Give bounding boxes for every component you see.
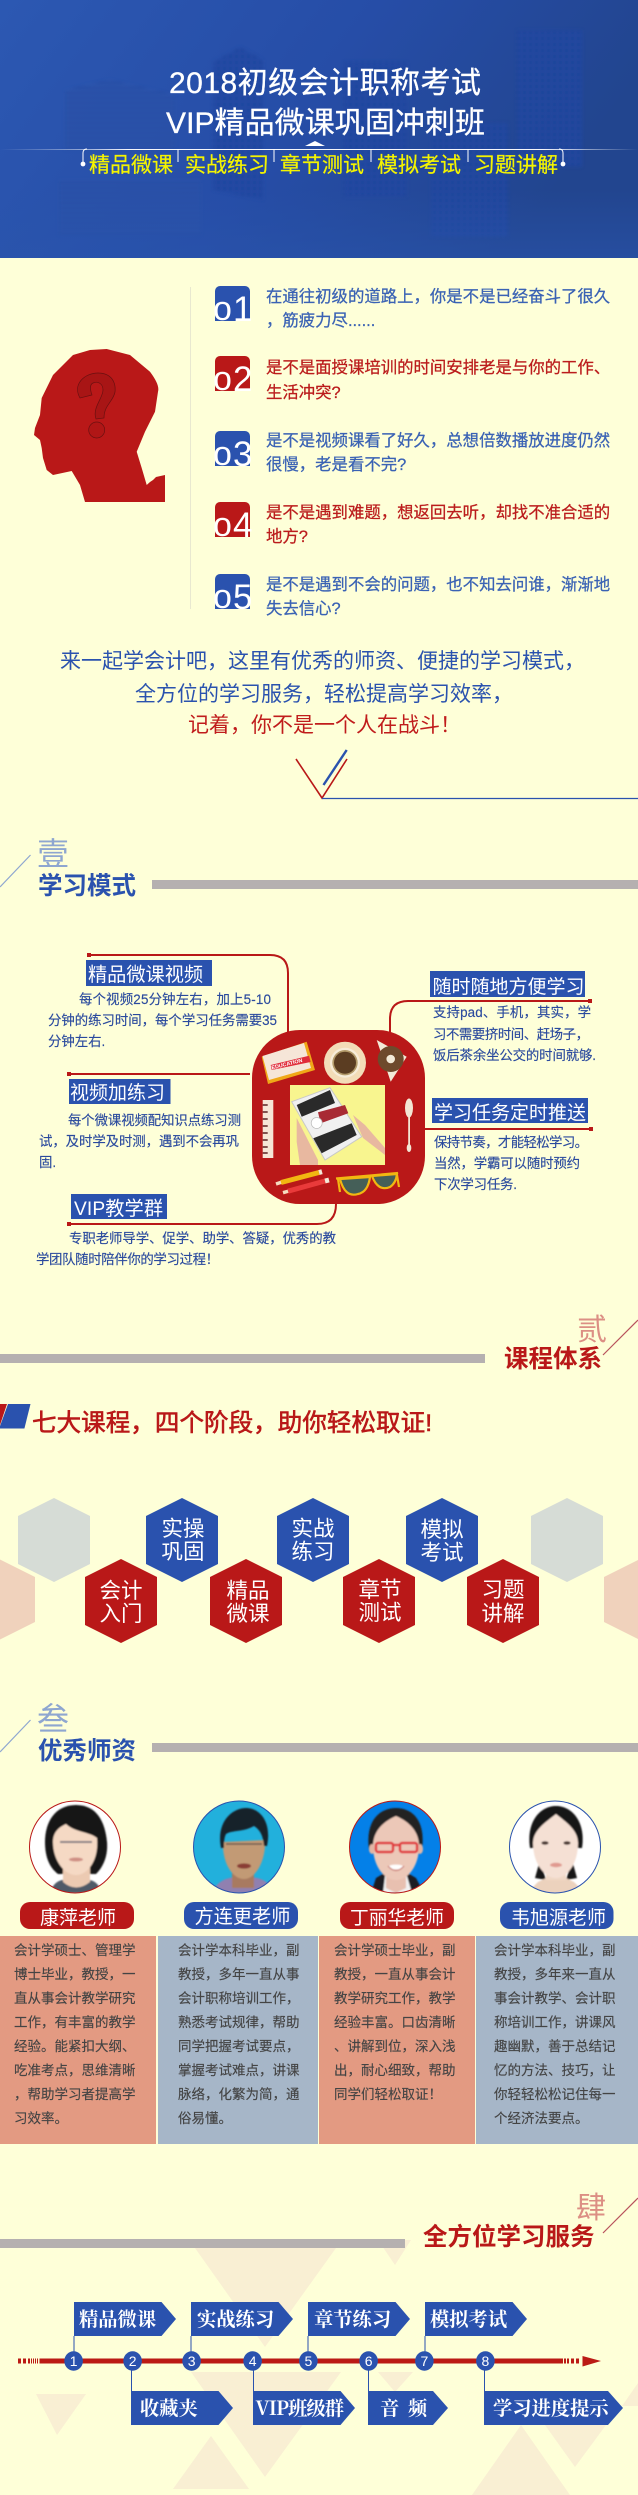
central red block <box>252 1030 425 1204</box>
feature: 学习任务定时推送: 当然，学霸可以随时预约 <box>434 1155 580 1171</box>
icon: book <box>262 1042 315 1084</box>
section heading: 课程体系: 贰 <box>577 1314 607 1347</box>
divider bracket <box>0 141 638 166</box>
node markers: 4 <box>249 2353 257 2369</box>
hex: 习题讲解: 习题 <box>481 1578 525 1602</box>
callout text <box>60 650 585 737</box>
bio: 教授，一直从事会计 <box>334 1967 456 1982</box>
flag: 收藏夹: 收藏夹 <box>140 2393 198 2421</box>
portrait <box>29 1801 121 1893</box>
hex: 精品微课 <box>210 1559 282 1643</box>
section heading: 优秀师资 <box>0 1701 638 1765</box>
feature: 精品微课视频: 每个视频25分钟左右，加上5-10 <box>79 991 271 1007</box>
callout text: 全方位的学习服务，轻松提高学习效率， <box>135 683 513 706</box>
teacher: 康萍 <box>0 1801 156 2144</box>
bio: 教学研究工作，教学 <box>334 1991 456 2006</box>
icon: spoon <box>405 1098 413 1152</box>
section heading: 全方位学习服务: 全方位学习服务 <box>423 2222 594 2251</box>
bio <box>0 1936 156 2144</box>
node markers: 2 <box>129 2353 137 2369</box>
feature: 随时随地方便学习: 习不需要挤时间、赶场子， <box>433 1027 589 1042</box>
question 03: 是不是视频课看了好久，总想倍数播放进度仍然 <box>266 432 610 450</box>
flag: 音频: 频 <box>408 2393 429 2421</box>
question 05: 失去信心? <box>266 600 341 618</box>
question 02: 是不是面授课培训的时间安排老是与你的工作、 <box>266 359 610 377</box>
hex: 实操巩固 <box>146 1498 218 1582</box>
bio: 你轻轻松松记住每一 <box>494 2087 616 2102</box>
hex: 习题讲解: 讲解 <box>481 1602 525 1626</box>
question 05: 5 <box>233 578 252 617</box>
callout text: 记着，你不是一个人在战斗！ <box>188 714 461 737</box>
feature: VIP教学群: VIP教学群 <box>74 1198 163 1220</box>
course tags: 模拟考试 <box>377 154 461 177</box>
panel: learning mode diagram <box>36 953 596 1267</box>
bio: 工作，有丰富的教学 <box>14 2014 136 2030</box>
feature: 精品微课视频: 精品微课视频 <box>88 964 203 986</box>
bio: 吃准考点，思维清晰 <box>14 2063 136 2078</box>
feature: VIP教学群: 学团队随时陪伴你的学习过程！ <box>36 1252 219 1267</box>
portrait <box>193 1801 285 1893</box>
name <box>340 1902 454 1929</box>
flag: 章节练习 <box>308 2302 410 2336</box>
node markers: 1 <box>70 2353 78 2369</box>
question 03: 很慢，老是看不完? <box>266 456 406 474</box>
title: 2018初级会计职称考试 <box>169 67 481 100</box>
icon: pencils <box>276 1172 329 1193</box>
hexagon course diagram <box>0 1498 638 1643</box>
divider <box>190 287 191 609</box>
questions list <box>213 286 610 618</box>
bio: 趣幽默，善于总结记 <box>494 2039 616 2054</box>
callout text: 来一起学会计吧，这里有优秀的师资、便捷的学习模式， <box>60 650 585 673</box>
question 04: 4 <box>233 506 252 545</box>
section heading: 优秀师资: 优秀师资 <box>38 1737 136 1765</box>
feature: 精品微课视频: 分钟左右. <box>48 1033 105 1049</box>
feature: 视频加练习: 视频加练习 <box>70 1082 165 1104</box>
title <box>166 67 485 140</box>
course tags: 实战练习 <box>185 154 269 177</box>
illustration: tablet on yellow <box>290 1085 385 1165</box>
bio: 会计职称培训工作， <box>178 1991 300 2006</box>
question 04: 地方? <box>266 528 308 546</box>
flag: 模拟考试 <box>425 2302 527 2336</box>
flag: 模拟考试: 模拟考试 <box>430 2304 507 2332</box>
portrait <box>509 1801 601 1893</box>
flag: 精品微课 <box>74 2302 176 2336</box>
bio: 博士毕业，教授，一 <box>14 1966 136 1982</box>
teacher: 丁丽华 <box>319 1801 475 2144</box>
question 04: 是不是遇到难题，想返回去听，却找不准合适的 <box>266 504 610 522</box>
bio: 熟悉考试规律，帮助 <box>178 2015 300 2030</box>
bio: 、讲解到位，深入浅 <box>334 2039 456 2054</box>
feature: 随时随地方便学习: 随时随地方便学习 <box>432 976 585 998</box>
bio: 经验。能紧扣大纲、 <box>14 2039 136 2054</box>
question 01: ，筋疲力尽...... <box>266 312 375 330</box>
name: 方连更老师 <box>194 1906 290 1928</box>
hex: 章节测试: 测试 <box>358 1601 402 1625</box>
node markers: 7 <box>421 2353 429 2369</box>
feature: 学习任务定时推送: 学习任务定时推送 <box>434 1102 586 1124</box>
section heading: 学习模式 <box>0 836 638 900</box>
hex: 模拟考试 <box>406 1498 478 1582</box>
bio: 个经济法要点。 <box>494 2111 588 2126</box>
bio: 忆的方法、技巧，让 <box>494 2063 616 2078</box>
flag: 收藏夹 <box>131 2391 233 2425</box>
node markers: 8 <box>482 2353 490 2369</box>
bio <box>476 1936 638 2144</box>
teacher: 方连更 <box>158 1801 318 2144</box>
flag: 章节练习: 章节练习 <box>314 2304 391 2332</box>
hex: 会计入门: 会计 <box>99 1579 143 1603</box>
name: 韦旭源老师 <box>511 1907 606 1929</box>
hex: 章节测试 <box>343 1559 415 1643</box>
hex: 习题讲解 <box>467 1559 539 1643</box>
node markers: 5 <box>305 2353 313 2369</box>
header banner <box>0 0 638 258</box>
question 03: 3 <box>233 435 252 474</box>
teacher: 韦旭源 <box>476 1801 638 2144</box>
flag: 实战练习: 实战练习 <box>197 2304 274 2332</box>
question 04: o <box>213 506 232 544</box>
bio: 直从事会计教学研究 <box>14 1991 136 2006</box>
flag: 精品微课: 精品微课 <box>79 2304 156 2332</box>
question 01: o <box>213 290 232 328</box>
hex: 模拟考试: 考试 <box>420 1541 464 1565</box>
bio: 会计学本科毕业，副 <box>178 1943 300 1958</box>
hex: 实战练习 <box>277 1498 349 1582</box>
bio: 教授，多年一直从事 <box>178 1966 300 1982</box>
hex: 实战练习: 实战 <box>291 1517 335 1541</box>
course tags: 习题讲解 <box>474 154 558 177</box>
feature: 随时随地方便学习: 支持pad、手机，其实，学 <box>433 1005 591 1020</box>
node markers <box>64 2351 495 2371</box>
background triangles <box>36 2240 638 2495</box>
course tags: 章节测试 <box>280 154 364 177</box>
bio: 同学们轻松取证！ <box>334 2087 442 2102</box>
question 02: o <box>213 360 232 398</box>
flag: VIP班级群: VIP班级群 <box>256 2393 344 2421</box>
feature: 学习任务定时推送: 下次学习任务. <box>434 1177 517 1192</box>
question 05 <box>213 574 610 618</box>
stems <box>74 2336 484 2391</box>
bio: 掌握考试难点，讲课 <box>178 2063 300 2078</box>
feature: 视频加练习: 固. <box>39 1155 56 1170</box>
icon: coffee <box>324 1042 366 1084</box>
icon: check mark with line <box>296 750 638 798</box>
course tags: 精品微课 <box>89 154 173 177</box>
bio: 称培训工作，讲课风 <box>494 2015 616 2030</box>
question 05: o <box>213 578 232 616</box>
section heading: 全方位学习服务 <box>0 2192 638 2251</box>
bio <box>319 1936 475 2144</box>
icon: ruler <box>263 1100 273 1158</box>
name <box>20 1902 134 1929</box>
feature: VIP教学群 <box>36 1194 336 1267</box>
name: 康萍老师 <box>40 1907 116 1929</box>
hex: 实操巩固: 巩固 <box>161 1540 205 1564</box>
section heading: 课程体系: 课程体系 <box>504 1345 602 1373</box>
course tags <box>89 154 558 177</box>
section heading: 全方位学习服务: 肆 <box>576 2192 606 2225</box>
bio: 出，耐心细致，帮助 <box>334 2063 456 2078</box>
hex: 会计入门 <box>85 1559 157 1643</box>
question 01: 在通往初级的道路上，你是不是已经奋斗了很久 <box>266 288 610 306</box>
feature: 视频加练习 <box>39 1079 241 1170</box>
section heading: 优秀师资: 叁 <box>37 1701 69 1737</box>
portrait <box>349 1801 441 1893</box>
section heading: 学习模式: 学习模式 <box>38 872 136 900</box>
bio: 脉络，化繁为简，通 <box>178 2086 300 2102</box>
hex: 实战练习: 练习 <box>291 1540 335 1564</box>
bio: 经验丰富。口齿清晰 <box>334 2014 456 2030</box>
bio: 习效率。 <box>14 2110 68 2126</box>
timeline arrow <box>18 2356 601 2366</box>
question 02: 2 <box>233 360 252 399</box>
node markers: 6 <box>365 2353 373 2369</box>
icon: book: EDUCATION <box>271 1058 303 1071</box>
feature: 学习任务定时推送: 保持节奏，才能轻松学习。 <box>434 1135 588 1150</box>
question 05: 是不是遇到不会的问题，也不知去问谁，渐渐地 <box>266 576 610 594</box>
icon: donut <box>377 1040 407 1082</box>
feature: 随时随地方便学习: 饭后茶余坐公交的时间就够. <box>433 1047 596 1063</box>
feature: 视频加练习: 试，及时学及时测，遇到不会再巩 <box>39 1134 239 1149</box>
node markers: 3 <box>188 2353 196 2369</box>
hex: 精品微课: 精品 <box>226 1579 270 1603</box>
bio: 会计学硕士毕业，副 <box>334 1943 456 1958</box>
question 01 <box>213 286 610 330</box>
bio <box>158 1936 318 2144</box>
icon: sunglasses <box>336 1173 399 1195</box>
hex: 模拟考试: 模拟 <box>420 1518 464 1542</box>
title: VIP精品微课巩固冲刺班 <box>166 107 485 140</box>
question 04 <box>213 502 610 546</box>
section heading: 课程体系 <box>0 1314 638 1373</box>
hex: 精品微课: 微课 <box>226 1602 270 1626</box>
section heading: 学习模式: 壹 <box>37 836 69 872</box>
flag: 学习进度提示: 学习进度提示 <box>493 2393 610 2421</box>
feature: VIP教学群: 专职老师导学、促学、助学、答疑，优秀的教 <box>69 1230 336 1246</box>
bio: 事会计教学、会计职 <box>494 1991 616 2006</box>
question 02 <box>213 356 610 402</box>
bio: 教授，多年来一直从 <box>494 1966 616 1982</box>
name <box>184 1902 298 1929</box>
bio: 俗易懂。 <box>178 2111 232 2126</box>
subheading: seven courses: 七大课程，四个阶段，助你轻松取证! <box>32 1409 432 1437</box>
flag: 实战练习 <box>191 2302 293 2336</box>
bio: 会计学本科毕业，副 <box>494 1943 616 1958</box>
bio: 同学把握考试要点， <box>178 2039 300 2054</box>
flag: 学习进度提示 <box>484 2391 623 2425</box>
timeline <box>18 2302 623 2425</box>
question 01: 1 <box>233 290 252 329</box>
decorative hexagons <box>0 1498 638 1640</box>
icon: head silhouette with question mark <box>34 349 165 502</box>
feature: 学习任务定时推送 <box>432 1098 588 1192</box>
feature: 随时随地方便学习 <box>430 971 596 1063</box>
hex: 实操巩固: 实操 <box>161 1517 205 1541</box>
flag: 音频 <box>368 2391 448 2425</box>
name <box>500 1902 614 1929</box>
name: 丁丽华老师 <box>350 1907 444 1928</box>
bio: ，帮助学习者提高学 <box>14 2086 136 2102</box>
feature: 视频加练习: 每个微课视频配知识点练习测 <box>68 1112 241 1128</box>
feature: 精品微课视频 <box>48 960 277 1049</box>
hex: 会计入门: 入门 <box>99 1602 143 1626</box>
flag: 音频: 音 <box>380 2393 399 2421</box>
bio: 会计学硕士、管理学 <box>14 1943 136 1958</box>
connector lines <box>69 955 591 1224</box>
question 02: 生活冲突? <box>266 384 341 402</box>
hex: 章节测试: 章节 <box>358 1578 402 1602</box>
question 03 <box>213 431 610 474</box>
question 03: o <box>213 435 232 473</box>
feature: 精品微课视频: 分钟的练习时间，每个学习任务需要35 <box>48 1012 277 1028</box>
